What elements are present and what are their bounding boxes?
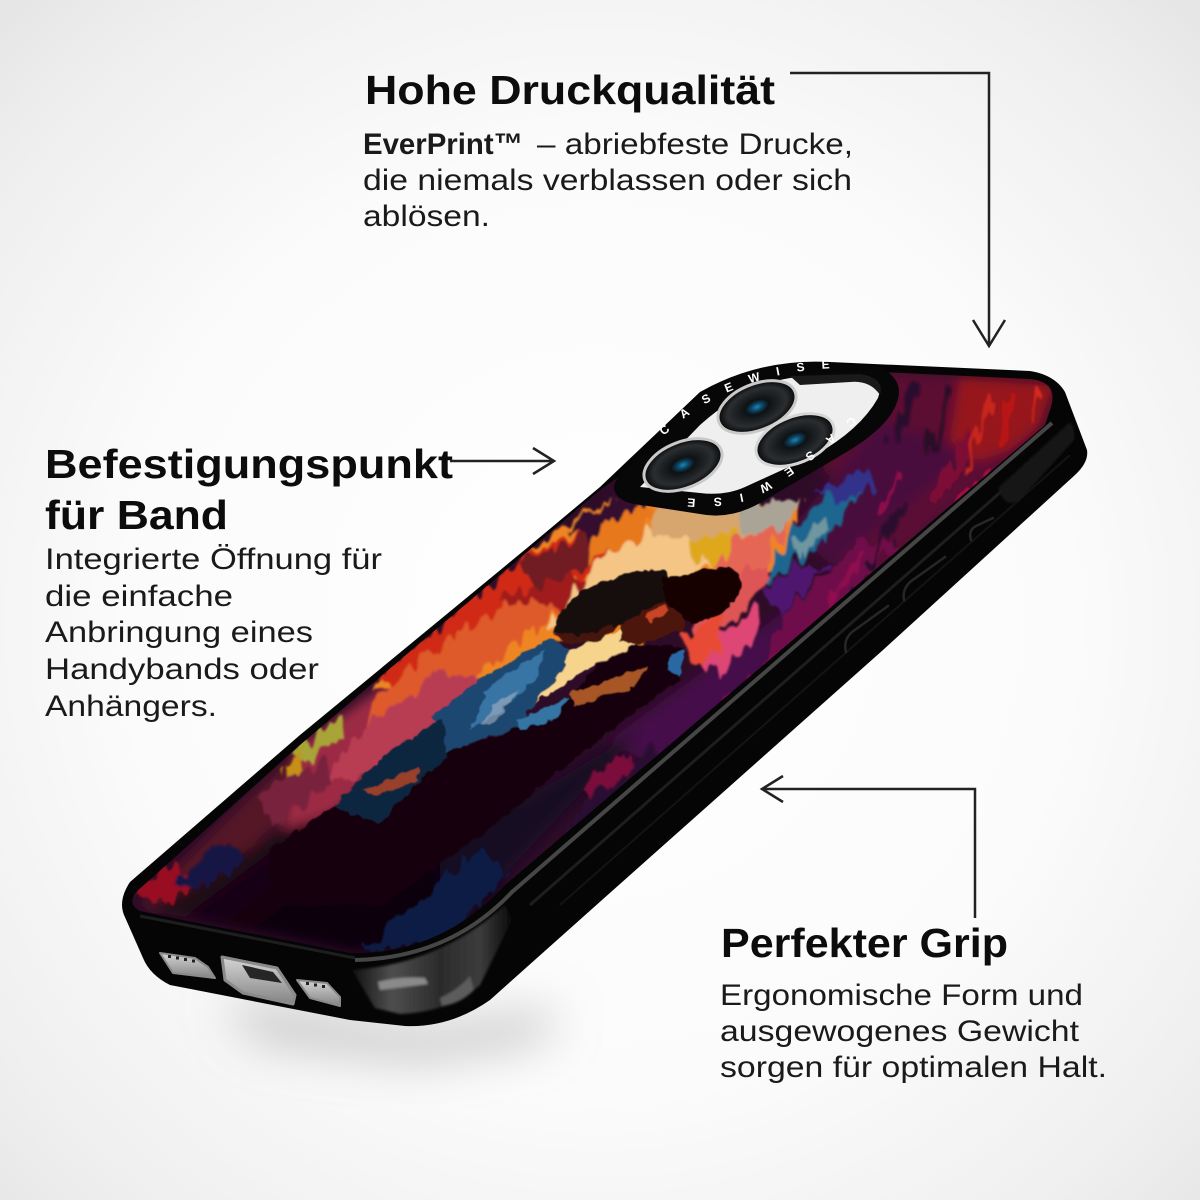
- hands: [570, 667, 647, 705]
- body text: [720, 979, 1107, 1084]
- body text: ablösen.: [363, 200, 490, 233]
- blue shirt: [433, 638, 570, 753]
- body text: sorgen für optimalen Halt.: [720, 1051, 1107, 1084]
- callout: strap attachment: [45, 441, 453, 723]
- body text: Handybands oder: [45, 653, 319, 686]
- heading: Befestigungspunkt für Band: [45, 441, 453, 538]
- phone case: [122, 362, 1088, 1026]
- brush strokes: [135, 385, 1040, 950]
- lens two: [748, 403, 842, 477]
- body text: ausgewogenes Gewicht: [720, 1015, 1080, 1048]
- heading: Hohe Druckqualität: Hohe Druckqualität: [365, 67, 775, 113]
- brand ring top: CASEWISE: [660, 362, 830, 434]
- artwork on the back: [132, 372, 1052, 953]
- body text: Integrierte Öffnung für: [45, 543, 382, 576]
- mute switch: [998, 422, 1074, 503]
- right speaker: [297, 980, 340, 1006]
- arrow: strap attachment: [450, 448, 554, 474]
- body text: EverPrint™: [363, 128, 523, 161]
- charging port and speakers: [160, 953, 340, 1006]
- callout: print quality: [363, 67, 853, 233]
- back and sleeve: [333, 717, 447, 823]
- dark jacket: [270, 645, 683, 905]
- arrow: grip: [762, 776, 975, 918]
- case body: [122, 362, 1087, 1026]
- arrow: print quality: [790, 73, 1005, 346]
- left speaker: [160, 953, 215, 978]
- brand ring bottom: CASEWISE: [688, 418, 856, 507]
- callout: grip: [720, 920, 1107, 1084]
- case edge highlight: [355, 423, 1052, 960]
- usb port: [222, 957, 295, 1004]
- heading: Befestigungspunkt für Band: Befestigungspunkt: [45, 441, 453, 487]
- bottom right corner reflection: [352, 905, 512, 1014]
- camera window: [640, 375, 880, 494]
- body text: – abriebfeste Drucke,: [537, 128, 853, 161]
- body text: die niemals verblassen oder sich: [363, 164, 852, 197]
- hair: [553, 570, 670, 636]
- lens one: [710, 370, 804, 444]
- body text: [363, 128, 853, 233]
- phone shadow: [220, 1000, 560, 1060]
- body text: Anhängers.: [45, 690, 217, 723]
- body text: [45, 543, 382, 723]
- heading: Perfekter Grip: Perfekter Grip: [721, 920, 1008, 966]
- faces: [553, 622, 620, 643]
- body text: Ergonomische Form und: [720, 979, 1083, 1012]
- heading: Befestigungspunkt für Band: für Band: [45, 492, 228, 538]
- side buttons: [845, 518, 993, 652]
- body text: Anbringung eines: [45, 616, 313, 649]
- cream gap: [533, 630, 637, 703]
- camera bump: [614, 362, 899, 516]
- couple figures: [270, 566, 741, 905]
- blue collar: [668, 650, 685, 677]
- lens three: [636, 428, 730, 502]
- body text: die einfache: [45, 580, 233, 613]
